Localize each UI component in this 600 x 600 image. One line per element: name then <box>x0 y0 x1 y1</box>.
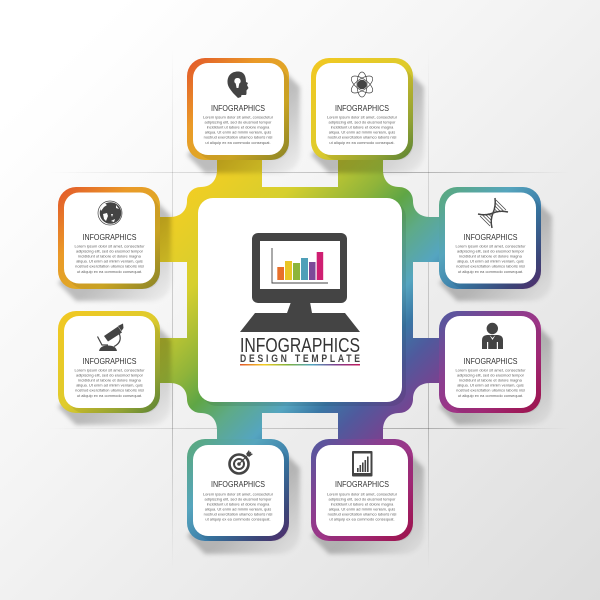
body text: Lorem ipsum dolor sit amet, consectetur <box>327 114 398 120</box>
body text: nostrud exercitation ullamco laboris nisi <box>328 135 396 140</box>
card: tablet chart <box>311 439 413 541</box>
body text: aliqua. Ut enim ad minim veniam, quis <box>205 506 271 511</box>
body text: adipiscing elit, sed do eiusmod tempor <box>76 373 144 378</box>
card: globe <box>58 187 160 289</box>
body text: aliqua. Ut enim ad minim veniam, quis <box>457 383 524 388</box>
body text: ut aliquip ex ea commodo consequat. <box>329 517 395 522</box>
white panel <box>64 316 155 408</box>
heading: INFOGRAPHICS <box>335 479 389 489</box>
body text: ut aliquip ex ea commodo consequat. <box>458 393 523 398</box>
heading: INFOGRAPHICS <box>464 356 518 366</box>
heading: INFOGRAPHICS <box>82 232 137 242</box>
white panel <box>445 192 536 284</box>
main title: INFOGRAPHICS <box>240 334 360 357</box>
icon: target <box>230 450 253 474</box>
white panel <box>64 192 155 284</box>
body text: ut aliquip ex ea commodo consequat. <box>329 140 395 145</box>
frame <box>311 439 413 541</box>
card: DNA <box>439 187 541 289</box>
body text: incididunt ut labore et dolore magna <box>459 378 523 383</box>
heading: INFOGRAPHICS <box>464 232 518 242</box>
frame <box>311 58 413 160</box>
frame <box>439 187 541 289</box>
body text: ut aliquip ex ea commodo consequat. <box>458 269 523 274</box>
white panel <box>316 63 408 155</box>
body text: nostrud exercitation ullamco laboris nisi <box>75 388 144 393</box>
body text: incididunt ut labore et dolore magna <box>207 125 270 130</box>
heading: INFOGRAPHICS <box>82 356 137 366</box>
subtitle: DESIGN TEMPLATE <box>240 353 360 365</box>
body text: nostrud exercitation ullamco laboris nisi <box>204 135 272 140</box>
body text: ut aliquip ex ea commodo consequat. <box>205 140 271 145</box>
frame <box>58 311 160 413</box>
body text: incididunt ut labore et dolore magna <box>78 378 142 383</box>
body text: aliqua. Ut enim ad minim veniam, quis <box>457 259 524 264</box>
white panel <box>193 63 284 155</box>
body text: adipiscing elit, sed do eiusmod tempor <box>329 120 396 125</box>
rainbow underline <box>240 364 360 366</box>
icon: person <box>482 323 503 349</box>
body text: nostrud exercitation ullamco laboris nisi <box>204 512 272 516</box>
body text: adipiscing elit, sed do eiusmod tempor <box>205 496 272 501</box>
central panel <box>198 198 406 406</box>
body text: aliqua. Ut enim ad minim veniam, quis <box>76 383 143 388</box>
body text: incididunt ut labore et dolore magna <box>78 254 142 259</box>
body text: incididunt ut labore et dolore magna <box>459 254 523 259</box>
body text: Lorem ipsum dolor sit amet, consectetur <box>455 244 526 248</box>
icon: globe <box>98 201 122 225</box>
frame <box>439 311 541 413</box>
white panel <box>198 198 402 402</box>
body text: incididunt ut labore et dolore magna <box>331 501 394 506</box>
body text: nostrud exercitation ullamco laboris nisi <box>328 512 396 516</box>
body text: adipiscing elit, sed do eiusmod tempor <box>457 373 525 378</box>
body text: nostrud exercitation ullamco laboris nisi <box>456 264 525 269</box>
body text: incididunt ut labore et dolore magna <box>331 125 394 130</box>
bar chart <box>272 248 328 283</box>
body text: Lorem ipsum dolor sit amet, consectetur <box>203 114 274 120</box>
icon: DNA <box>478 198 508 228</box>
body text: aliqua. Ut enim ad minim veniam, quis <box>329 506 395 511</box>
frame <box>187 439 289 541</box>
body text: ut aliquip ex ea commodo consequat. <box>77 269 142 274</box>
body text: Lorem ipsum dolor sit amet, consectetur <box>74 244 145 248</box>
body text: aliqua. Ut enim ad minim veniam, quis <box>76 259 143 264</box>
body text: nostrud exercitation ullamco laboris nisi <box>75 264 144 269</box>
frame <box>187 58 289 160</box>
body text: Lorem ipsum dolor sit amet, consectetur <box>327 491 398 496</box>
card: head with light bulb <box>187 58 289 160</box>
body text: Lorem ipsum dolor sit amet, consectetur <box>455 368 526 372</box>
body text: nostrud exercitation ullamco laboris nisi <box>456 388 525 393</box>
body text: adipiscing elit, sed do eiusmod tempor <box>76 249 144 254</box>
icon: head with light bulb <box>228 72 248 98</box>
white panel <box>445 316 536 408</box>
card: atom <box>311 58 413 160</box>
body text: incididunt ut labore et dolore magna <box>207 501 270 506</box>
icon: microscope <box>98 324 124 351</box>
body text: aliqua. Ut enim ad minim veniam, quis <box>205 130 271 135</box>
body text: ut aliquip ex ea commodo consequat. <box>205 517 271 522</box>
white panel <box>193 445 284 536</box>
heading: INFOGRAPHICS <box>335 103 389 113</box>
body text: ut aliquip ex ea commodo consequat. <box>77 393 142 398</box>
card: person <box>439 311 541 413</box>
heading: INFOGRAPHICS <box>211 103 265 113</box>
body text: Lorem ipsum dolor sit amet, consectetur <box>203 491 274 496</box>
body text: adipiscing elit, sed do eiusmod tempor <box>205 120 272 125</box>
card: microscope <box>58 311 160 413</box>
frame <box>58 187 160 289</box>
white panel <box>316 445 408 536</box>
panel shadow <box>202 202 406 406</box>
card: target <box>187 439 289 541</box>
body text: Lorem ipsum dolor sit amet, consectetur <box>74 368 145 372</box>
heading: INFOGRAPHICS <box>211 479 265 489</box>
icon: computer monitor with chart <box>240 233 360 332</box>
body text: adipiscing elit, sed do eiusmod tempor <box>457 249 525 254</box>
long shadows <box>58 62 552 554</box>
icon: atom <box>349 72 375 97</box>
body text: aliqua. Ut enim ad minim veniam, quis <box>329 130 395 135</box>
body text: adipiscing elit, sed do eiusmod tempor <box>329 496 396 501</box>
central gradient frame with connectors <box>150 150 450 450</box>
icon: tablet chart <box>352 451 372 476</box>
